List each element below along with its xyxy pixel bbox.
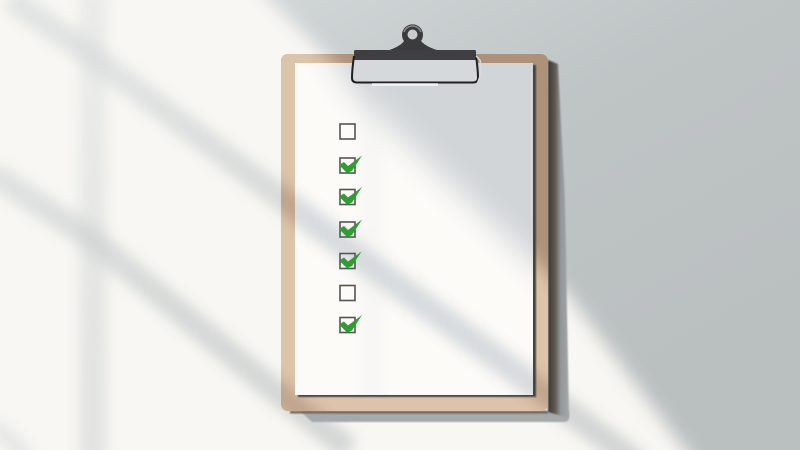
checkbox 6 empty <box>340 286 355 300</box>
checkbox 7 checked <box>339 315 362 332</box>
sheet of paper <box>295 63 536 397</box>
clip highlights <box>476 56 481 84</box>
clipboard cast shadow <box>300 60 569 422</box>
checkbox 2 checked <box>339 156 362 173</box>
metal clip <box>352 24 481 84</box>
checkbox 1 empty <box>340 124 355 139</box>
checkbox 5 checked <box>339 252 362 268</box>
checkbox 3 checked <box>339 187 362 204</box>
clip top bar <box>354 50 476 60</box>
clip ring and wings <box>386 24 440 51</box>
clipboard board <box>281 54 548 414</box>
clip outline <box>352 56 478 82</box>
checklist <box>339 124 362 332</box>
checkbox 4 checked <box>339 220 362 237</box>
clip plate <box>352 57 478 82</box>
